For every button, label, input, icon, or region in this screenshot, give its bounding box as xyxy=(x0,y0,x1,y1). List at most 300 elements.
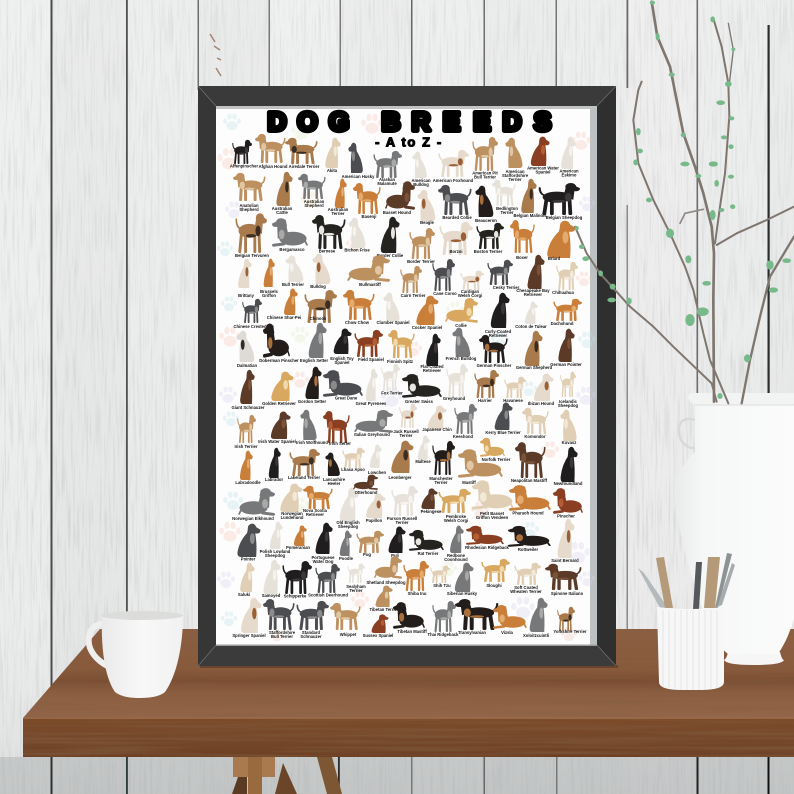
poster sheet xyxy=(216,106,597,646)
breed: Icelandic Sheepdog: Icelandic xyxy=(559,399,577,404)
breed: Pinscher xyxy=(553,488,582,518)
breed: Tibetan Terrier xyxy=(370,585,399,612)
breed: Cane Corso: Cane Corso xyxy=(433,291,457,296)
breed: Samoyed: Samoyed xyxy=(262,593,281,598)
breed: Great Dane: Great Dane xyxy=(335,396,358,400)
breed: Chow Chow: Chow Chow xyxy=(345,320,370,325)
breed: Labradoodle xyxy=(235,451,261,485)
breed: Pointer: Pointer xyxy=(241,556,256,562)
breed: Border Collie: Border Collie xyxy=(377,253,404,258)
breed: Australian Terrier: Australian xyxy=(328,207,348,212)
vase body xyxy=(675,405,794,654)
breed: Affenpinscher xyxy=(230,140,258,168)
breed: Collie: Collie xyxy=(455,323,467,328)
breed: Dalmatian xyxy=(236,331,257,368)
breed: Golden Retriever xyxy=(262,372,296,406)
breed: Polish Lowland Sheepdog: Sheepdog xyxy=(265,553,286,558)
title: DOG BREEDS xyxy=(268,106,551,136)
breed: Pug xyxy=(357,531,384,557)
breed: Airedale Terrier xyxy=(285,138,320,169)
breed: Redbone Coonhound: Coonhound xyxy=(444,557,468,562)
breed: English Toy Spaniel: Spaniel xyxy=(335,360,349,365)
breed: American Staffordshire Terrier xyxy=(502,138,529,182)
breed: American Eskimo: Eskimo xyxy=(562,172,577,178)
breed: Belgian Tervuren xyxy=(235,213,269,258)
breed: Shih Tzu: Shih Tzu xyxy=(433,583,451,588)
breed: Chinese Shar-Pei xyxy=(267,289,301,320)
breed: Akita xyxy=(325,138,341,173)
breed: Komondor: Komondor xyxy=(524,434,546,439)
breed: Standard Schnauzer: Schnauzer xyxy=(300,634,322,639)
breed: Cesky Terrier: Cesky Terrier xyxy=(493,285,520,290)
breed: Bearded Collie: Bearded Collie xyxy=(442,215,472,220)
breed: Chow Chow xyxy=(343,290,374,325)
breed: Australian Terrier: Terrier xyxy=(332,211,345,216)
ruler xyxy=(704,557,720,608)
breed: Basset Hound xyxy=(383,181,415,215)
breed: Flat-Coated Retriever: Retriever xyxy=(423,368,441,373)
breed: Irish Terrier xyxy=(235,415,258,449)
breed: Icelandic Sheepdog: Sheepdog xyxy=(558,403,579,408)
breed: American Staffordshire Terrier: Terrier xyxy=(509,177,522,182)
breed: Jack Russell Terrier: Jack Russell xyxy=(393,429,419,434)
frame: right rail xyxy=(597,86,616,666)
breed: Leonberger: Leonberger xyxy=(388,475,412,480)
breed: Saluki: Saluki xyxy=(238,592,250,597)
breed: Ibizan Hound xyxy=(528,374,555,406)
breed: Staffordshire Bull Terrier: Bull Terrier xyxy=(271,634,293,639)
mug body xyxy=(102,615,183,698)
breed: Pointer xyxy=(237,524,260,562)
breed: Transylvanian xyxy=(455,599,497,635)
breed: Chesapeake Bay Retriever xyxy=(516,255,550,297)
breed: Chesapeake Bay Retriever: Chesapeake Bay xyxy=(516,288,550,293)
breed: Coton de Tulear: Coton de Tulear xyxy=(515,324,547,329)
breed: Belgian Malinois: Belgian Malinois xyxy=(513,213,547,218)
breed: Staffordshire Bull Terrier xyxy=(263,599,296,639)
breed: American Husky: American Husky xyxy=(342,174,375,179)
breed: Redbone Coonhound xyxy=(444,526,468,562)
breed: Chinook xyxy=(305,290,337,322)
pencil xyxy=(717,563,735,607)
title: DOG BREEDS: G xyxy=(329,106,349,136)
breed: Dachshund: Dachshund xyxy=(551,321,574,326)
breed: Greater Swiss xyxy=(402,374,441,404)
breed: Spinone Italiano xyxy=(545,564,584,596)
breed: Siberian Husky xyxy=(447,563,478,596)
breed: Irish Wolfhound: Irish Wolfhound xyxy=(296,440,328,445)
breed: Papillon xyxy=(366,494,386,523)
breed: Old English Sheepdog: Old English xyxy=(336,520,360,525)
breed: Portuguese Water Dog: Portuguese xyxy=(311,555,335,560)
breed: Samoyed xyxy=(262,560,281,598)
breed: Australian Shepherd: Australian xyxy=(304,199,324,204)
subtitle: A to Z: - A to Z - xyxy=(375,134,443,150)
breed: Nova Scotia Retriever xyxy=(303,486,332,517)
breed: Lakeland Terrier: Lakeland Terrier xyxy=(288,475,321,480)
breed: Bulldog xyxy=(310,254,330,289)
breed: Schipperke: Schipperke xyxy=(284,594,307,598)
breed: Papillon: Papillon xyxy=(366,518,383,523)
breed: Icelandic Sheepdog xyxy=(558,372,579,408)
breed: Kuvasz xyxy=(560,410,577,445)
breed: Pug: Pug xyxy=(363,552,371,557)
breed: Lhasa Apso xyxy=(341,448,365,472)
breed: Curly-Coated Retriever: Retriever xyxy=(489,333,507,338)
breed: Neapolitan Mastiff: Neapolitan Mastiff xyxy=(511,478,548,483)
breed: Flat-Coated Retriever: Flat-Coated xyxy=(420,364,444,369)
breed: Otterhound: Otterhound xyxy=(355,490,378,495)
breed: Scottish Deerhound: Scottish Deerhound xyxy=(308,592,348,598)
breed: Collie xyxy=(446,298,478,328)
breed: Beagle xyxy=(417,190,435,225)
breed: Labradoodle: Labradoodle xyxy=(235,480,261,485)
breed: German Shepherd: German Shepherd xyxy=(516,365,553,370)
breed: Cane Corso xyxy=(433,259,457,296)
breed: Manchester Terrier: Manchester xyxy=(429,476,453,481)
pen xyxy=(715,553,732,608)
breed: German Shepherd xyxy=(516,331,553,370)
breed: Parson Russell Terrier xyxy=(387,486,418,525)
breed: Sealyham Terrier: Sealyham xyxy=(346,584,366,589)
breed: Great Dane xyxy=(323,370,362,400)
breed: Curly-Coated Retriever: Curly-Coated xyxy=(485,329,511,334)
mug handle xyxy=(89,624,116,669)
breed: Neapolitan Mastiff xyxy=(511,442,548,483)
title: DOG BREEDS: E xyxy=(473,106,491,136)
breed: Norwegian Lundehund: Lundehund xyxy=(281,515,304,520)
breed: Akita: Akita xyxy=(327,168,338,173)
breed: Lancashire Heeler: Lancashire xyxy=(323,477,345,482)
breed: American Bulldog xyxy=(411,152,431,187)
vase foot xyxy=(724,652,784,665)
breed: Manchester Terrier xyxy=(429,441,455,485)
breed: Redbone Coonhound: Redbone xyxy=(447,553,465,558)
breed: Lowchen: Lowchen xyxy=(368,470,387,475)
breed: Keeshond: Keeshond xyxy=(453,434,474,439)
breed: American Staffordshire Terrier: Staffordshire xyxy=(502,173,529,178)
breed: Bergamasco: Bergamasco xyxy=(279,247,305,252)
breed: Sussex Spaniel: Sussex Spaniel xyxy=(363,633,393,638)
breed: Norwegian Elkhound xyxy=(232,488,275,521)
breed: Mastiff: Mastiff xyxy=(462,480,476,485)
vase handle xyxy=(679,419,696,448)
breed: Australian Terrier xyxy=(328,179,349,216)
breed: Australian Cattle: Cattle xyxy=(276,210,288,215)
breed: Shih Tzu xyxy=(431,566,451,588)
breed: Chihuahua: Chihuahua xyxy=(552,290,574,295)
breed: Harrier: Harrier xyxy=(478,398,492,403)
breed: Manchester Terrier: Terrier xyxy=(435,480,448,485)
ruler xyxy=(656,557,673,608)
breed: Soft Coated Wheaten Terrier: Wheaten Terrier xyxy=(510,589,542,594)
breed: Bichon Frise: Bichon Frise xyxy=(344,248,370,252)
breed: Lowchen xyxy=(368,444,387,475)
breed: Pinscher: Pinscher xyxy=(557,514,575,518)
breed: American Husky xyxy=(342,143,375,179)
breed: Basset Hound: Basset Hound xyxy=(383,210,412,215)
breed: Cairn Terrier: Cairn Terrier xyxy=(401,293,426,298)
breed: Sussex Spaniel xyxy=(363,614,393,638)
breed: German Pinscher xyxy=(477,335,512,368)
breed: Leonberger xyxy=(388,441,413,480)
breed: Poodle: Poodle xyxy=(339,556,354,561)
breed: Lhasa Apso: Lhasa Apso xyxy=(341,467,365,472)
breed: Doberman Pinscher xyxy=(259,323,299,363)
breed: American Water Spaniel: American Water xyxy=(527,166,559,170)
breed: Irish Setter: Irish Setter xyxy=(329,441,351,446)
breed: Parson Russell Terrier: Terrier xyxy=(396,520,409,525)
breed: Clumber Spaniel xyxy=(376,293,410,325)
breed: Bullmastiff xyxy=(348,255,390,287)
breed: Field Spaniel: Field Spaniel xyxy=(358,357,384,362)
breed: Flat-Coated Retriever xyxy=(420,334,444,373)
breed: Pembroke Welsh Corgi: Welsh Corgi xyxy=(444,518,468,523)
breed: Cardigan Welsh Corgi: Welsh Corgi xyxy=(458,293,482,298)
pencil cup with rulers and pencils xyxy=(638,553,735,690)
breed: Rat Terrier xyxy=(409,530,443,556)
breed: Bulldog: Bulldog xyxy=(310,284,326,289)
breed: Tibetan Terrier: Tibetan Terrier xyxy=(370,607,399,612)
breed: Giant Schnauzer xyxy=(231,370,265,410)
breed: Field Spaniel xyxy=(355,330,384,362)
breed: Soft Coated Wheaten Terrier: Soft Coated xyxy=(514,585,538,590)
breed: Norwegian Elkhound: Norwegian Elkhound xyxy=(232,516,274,521)
breed: Saint Bernard: Saint Bernard xyxy=(551,558,579,563)
breed: Transylvanian: Transylvanian xyxy=(458,630,486,635)
breed: Xoloitzcuintli: Xoloitzcuintli xyxy=(523,633,549,638)
breed: Border Terrier xyxy=(407,228,435,264)
breed: Norwegian Lundehund xyxy=(280,484,304,520)
breed: Cesky Terrier xyxy=(488,260,520,290)
title: DOG BREEDS: S xyxy=(534,106,551,136)
breed: Bearded Collie xyxy=(438,185,472,220)
breed: Newfoundland xyxy=(554,447,583,486)
breed: Anatolian Shepherd: Anatolian xyxy=(239,203,259,208)
breed: Doberman Pinscher: Doberman Pinscher xyxy=(259,358,299,363)
breed: Great Pyrenees xyxy=(356,369,387,406)
breed: Chinese Crested: Chinese Crested xyxy=(233,324,267,329)
breed: Thai Ridgeback xyxy=(428,601,459,637)
breed: Maltese: Maltese xyxy=(415,459,431,464)
breed: Australian Cattle xyxy=(272,172,293,215)
breed: Coton de Tulear xyxy=(515,301,547,329)
breed: Australian Shepherd: Shepherd xyxy=(304,203,324,208)
breed: Rhodesian Ridgeback: Rhodesian Ridgeback xyxy=(465,545,510,550)
breed: Saluki xyxy=(238,563,255,597)
breed: Rat Terrier: Rat Terrier xyxy=(418,551,439,556)
breed: Borzoi: Borzoi xyxy=(449,249,463,254)
vase rim xyxy=(688,393,794,405)
breed: Vizsla: Vizsla xyxy=(501,630,514,635)
breed: Staffordshire Bull Terrier: Staffordshire xyxy=(269,630,295,635)
breed: Bull Terrier xyxy=(282,256,304,287)
breed: Cocker Spaniel: Cocker Spaniel xyxy=(412,325,442,330)
mug rim xyxy=(101,611,183,620)
breed: Afghan Hound xyxy=(255,134,288,169)
breed: Harrier xyxy=(475,370,499,403)
breed: Border Collie xyxy=(377,217,404,258)
breed: American Water Spaniel xyxy=(527,137,559,174)
breed: Greyhound: Greyhound xyxy=(443,396,466,401)
breed: Saint Bernard xyxy=(551,519,579,563)
breed: Norfolk Terrier: Norfolk Terrier xyxy=(482,457,511,462)
breed: Great Pyrenees: Great Pyrenees xyxy=(356,401,387,406)
table legs xyxy=(232,757,342,794)
breed: Springer Spaniel: Springer Spaniel xyxy=(232,633,266,638)
breed: Borzoi xyxy=(440,222,473,254)
breed: Gordon Setter: Gordon Setter xyxy=(298,399,326,404)
breed: Fox Terrier: Fox Terrier xyxy=(381,390,403,396)
breed: Polish Lowland Sheepdog xyxy=(260,522,291,558)
breed: Clumber Spaniel: Clumber Spaniel xyxy=(376,320,410,325)
breed: Pomeranian: Pomeranian xyxy=(286,545,310,550)
breed: German Pointer xyxy=(550,329,582,367)
pencil xyxy=(638,568,668,608)
title: DOG BREEDS: D xyxy=(503,106,521,136)
breed: Bernese: Bernese xyxy=(319,248,336,254)
breed: Sloughi: Sloughi xyxy=(486,583,502,588)
breed: Chesapeake Bay Retriever: Retriever xyxy=(524,292,542,297)
breed: Australian Cattle: Australian xyxy=(272,206,292,211)
breed: Yorkshire Terrier xyxy=(553,607,587,634)
breed: Maltese xyxy=(415,436,431,464)
breed: Otterhound xyxy=(354,475,378,495)
breed: Bedlington Terrier: Terrier xyxy=(501,210,514,215)
breed: Affenpinscher: Affenpinscher xyxy=(230,164,258,168)
breed: Boston Terrier xyxy=(474,223,504,254)
breed: Irish Water Spaniel xyxy=(258,412,296,444)
breed: Shetland Sheepdog xyxy=(366,556,406,585)
table top xyxy=(0,629,794,757)
picture frame with poster xyxy=(198,86,618,668)
breed: Petit Basset Griffon Vendeen xyxy=(472,480,513,520)
breed: American Pit Bull Terrier xyxy=(472,137,498,180)
breed: Ibizan Hound: Ibizan Hound xyxy=(528,401,555,406)
breed: Norfolk Terrier xyxy=(480,438,511,462)
breed: Finnish Spitz xyxy=(387,330,414,364)
breed: Afghan Hound: Afghan Hound xyxy=(259,164,288,169)
breed: Pembroke Welsh Corgi xyxy=(439,489,471,523)
breed: Alaskan Malamute: Malamute xyxy=(377,181,397,186)
breed: Pembroke Welsh Corgi: Pembroke xyxy=(446,514,466,519)
breed: Gordon Setter xyxy=(298,367,326,404)
breed: Bedlington Terrier: Bedlington xyxy=(496,206,518,211)
breed: Boston Terrier: Boston Terrier xyxy=(474,249,503,254)
breed: Jack Russell Terrier: Terrier xyxy=(400,433,413,438)
breed: Briard xyxy=(547,221,575,261)
breed: Dachshund xyxy=(551,299,582,326)
breed: Pharaoh Hound: Pharaoh Hound xyxy=(512,510,544,516)
breed: American Bulldog: American xyxy=(411,178,431,183)
title: DOG BREEDS: R xyxy=(412,106,431,136)
breed: Boxer: Boxer xyxy=(516,255,528,260)
title: DOG BREEDS: E xyxy=(443,106,460,136)
title: DOG BREEDS: D xyxy=(268,106,286,136)
breed: Yorkshire Terrier: Yorkshire Terrier xyxy=(553,629,587,634)
breed: Thai Ridgeback: Thai Ridgeback xyxy=(428,632,459,637)
breed: Chinook: Chinook xyxy=(310,316,327,321)
breed: Lancashire Heeler: Heeler xyxy=(328,481,341,486)
breed: Puli: Puli xyxy=(391,553,399,558)
breed: Shiba Inu: Shiba Inu xyxy=(408,591,427,596)
breed: Brussels Griffon xyxy=(260,259,279,298)
breed: Brittany xyxy=(238,259,255,298)
breed: Siberian Husky: Siberian Husky xyxy=(447,591,478,596)
breed: American Water Spaniel: Spaniel xyxy=(536,170,550,174)
breed: Polish Lowland Sheepdog: Polish Lowland xyxy=(260,549,290,554)
breed: Beauceron: Beauceron xyxy=(475,218,497,223)
breed: Golden Retriever: Golden Retriever xyxy=(262,401,296,406)
breed: Basenji: Basenji xyxy=(362,214,376,219)
breed: Anatolian Shepherd xyxy=(233,173,265,212)
breed: Kuvasz: Kuvasz xyxy=(562,440,576,445)
breed: Whippet xyxy=(330,603,360,637)
breed: Belgian Sheepdog xyxy=(540,183,583,220)
breed: Vizsla xyxy=(493,605,526,635)
breed: Bernese xyxy=(312,215,345,254)
breed: American Pit Bull Terrier: Bull Terrier xyxy=(474,174,496,180)
breed: Pekingese xyxy=(421,488,442,514)
frame: bottom rail xyxy=(198,645,616,666)
breed: American Eskimo xyxy=(559,137,579,178)
breed: Rottweiler: Rottweiler xyxy=(518,547,538,552)
breed: Standard Schnauzer xyxy=(297,601,329,639)
breed: English Toy Spaniel xyxy=(330,329,354,365)
breed: Kerry Blue Terrier: Kerry Blue Terrier xyxy=(485,430,521,435)
breed: Tibetan Mastiff xyxy=(393,602,427,634)
breed: Bullmastiff: Bullmastiff xyxy=(359,282,381,287)
breed: Soft Coated Wheaten Terrier xyxy=(510,563,542,594)
breed: Sealyham Terrier xyxy=(346,564,366,593)
breed: French Bulldog: French Bulldog xyxy=(446,356,477,361)
breed: Havanese: Havanese xyxy=(503,398,523,403)
breed: Brussels Griffon: Brussels xyxy=(260,289,278,294)
breed: Alaskan Malamute: Alaskan xyxy=(379,177,395,182)
title: DOG BREEDS: O xyxy=(297,106,318,136)
breed: Petit Basset Griffon Vendeen: Petit Basset xyxy=(480,511,504,516)
breed: English Setter: English Setter xyxy=(300,358,328,363)
breed: Springer Spaniel xyxy=(232,598,266,638)
breed: Briard: Briard xyxy=(548,256,561,261)
breed: Havanese xyxy=(503,377,526,403)
breed: Cocker Spaniel xyxy=(412,296,442,330)
breed: Norwegian Lundehund: Norwegian xyxy=(281,511,303,516)
breed: Bull Terrier: Bull Terrier xyxy=(282,282,304,287)
frame shadow on table xyxy=(200,665,618,668)
breed: Cardigan Welsh Corgi xyxy=(458,271,484,298)
breed: Greater Swiss: Greater Swiss xyxy=(405,399,434,404)
breed: Scottish Deerhound xyxy=(308,564,348,598)
breed: Belgian Sheepdog: Belgian Sheepdog xyxy=(546,215,583,220)
breed: Chihuahua xyxy=(552,262,578,295)
breed: Belgian Malinois xyxy=(513,179,547,218)
breed: Fox Terrier xyxy=(381,364,403,396)
breed: Irish Setter xyxy=(323,411,351,446)
breed: American Bulldog: Bulldog xyxy=(413,182,429,187)
breed: Boxer xyxy=(510,220,534,260)
breed: Old English Sheepdog: Sheepdog xyxy=(338,524,359,529)
breed: Basenji xyxy=(353,183,380,219)
cup body xyxy=(657,607,724,690)
breed: Schipperke xyxy=(283,561,312,598)
breed: Keeshond xyxy=(453,404,477,439)
breed: Australian Shepherd xyxy=(298,174,325,208)
breed: Jack Russell Terrier xyxy=(393,404,419,438)
breed: Xoloitzcuintli xyxy=(523,598,549,638)
breed: American Staffordshire Terrier: American xyxy=(505,169,525,174)
breed: Irish Water Spaniel: Irish Water Spaniel xyxy=(258,439,296,444)
